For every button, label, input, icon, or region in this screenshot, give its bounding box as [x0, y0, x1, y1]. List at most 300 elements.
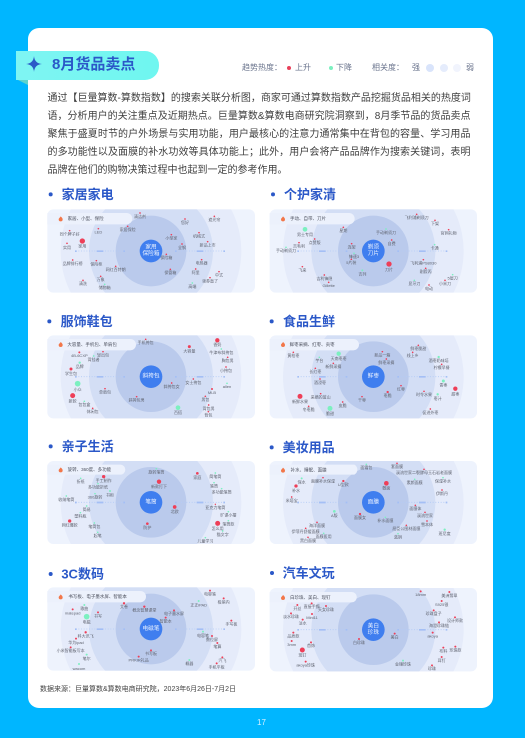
- keywords: wacom: [73, 666, 86, 671]
- keyword pill: 白珍珠、美白、现钉: [290, 594, 331, 601]
- keywords: 柠檬早餐: [434, 364, 450, 370]
- intro paragraph: 通过【巨量算数-算数指数】的搜索关联分析图，商家可通过算数指数产品挖掘货品相关的热度词: [48, 93, 471, 104]
- section heading: 食品生鲜: [283, 314, 335, 329]
- keywords: 屈臣公图材面膜: [392, 525, 420, 531]
- search relation chart: [47, 587, 255, 671]
- keywords: 海洋面膜: [309, 522, 325, 528]
- keywords: 5片装: [346, 259, 356, 265]
- keywords: LED: [94, 230, 102, 234]
- intro paragraph: 品牌在他们的购物决策过程中也起到一定的参考作用。: [48, 165, 288, 176]
- centre keyword: 刀片: [368, 249, 379, 257]
- keywords: [286, 462, 452, 543]
- centre keyword: 电磁笔: [143, 624, 160, 632]
- section bullet: [270, 445, 274, 449]
- keywords: 概器: [185, 660, 193, 666]
- keywords: 保水: [298, 478, 306, 484]
- keywords: 家庭: [193, 474, 201, 480]
- keywords: S925银: [435, 601, 448, 607]
- keywords: MLB: [208, 390, 216, 395]
- keywords: 18mm: [415, 592, 427, 597]
- keywords: 新款打下: [151, 483, 167, 489]
- keywords: 塑料瓶: [74, 512, 86, 518]
- keywords: 枣汁: [434, 395, 442, 401]
- keyword pill: [270, 339, 359, 350]
- keyword pill: 书写板、电子墨水屏、智能本: [68, 593, 127, 600]
- centre keyword: [362, 618, 385, 641]
- keywords: [60, 212, 223, 290]
- centre keyword: [140, 365, 162, 388]
- keywords: 米塔宝: [286, 497, 298, 503]
- section heading: 亲子生活: [62, 439, 114, 454]
- page number: 17: [257, 718, 266, 727]
- keywords: 领券直了: [202, 278, 218, 284]
- keywords: 阿里: [192, 269, 200, 275]
- keywords: [58, 468, 236, 544]
- section heading: 3C数码: [61, 567, 104, 582]
- keywords: 首饰: [307, 642, 315, 648]
- centre keyword: 剃须: [368, 243, 379, 251]
- keywords: 红枣: [397, 386, 405, 392]
- keywords: 飞利浦剃须刀: [405, 214, 429, 220]
- keywords: 休闲包: [87, 408, 99, 414]
- keywords: 面膜体: [409, 505, 421, 511]
- section bullet: [271, 192, 275, 196]
- keywords: 吉毛利: [293, 242, 305, 248]
- keywords: 吉利锋隐: [316, 275, 332, 281]
- keywords: allen: [223, 384, 231, 389]
- keywords: 全钢: [178, 244, 186, 250]
- intro paragraph: [48, 92, 471, 176]
- keywords: 您好: [181, 219, 189, 225]
- centre keyword: [140, 618, 162, 640]
- keywords: 笔筒包: [88, 523, 100, 529]
- section heading: 服饰鞋包: [61, 314, 113, 329]
- keywords: 珍珠: [428, 665, 436, 671]
- keywords: 多功能笔筒: [212, 488, 232, 494]
- keywords: 连架: [348, 244, 356, 250]
- heading ribbon: [16, 51, 159, 85]
- keywords: 收纳笔筒: [58, 496, 74, 502]
- keywords: 官网礼物: [441, 230, 457, 236]
- keywords: 背包男: [203, 405, 215, 411]
- keywords: 女士挎包: [185, 379, 201, 385]
- keyword pill: 旋转、360度、多功能: [68, 466, 112, 473]
- section heading: 个护家清: [284, 187, 336, 202]
- keywords: [276, 214, 458, 291]
- keywords: [57, 590, 237, 671]
- keywords: 小米智能板写本: [57, 647, 85, 653]
- keywords: 采摘的蓝山: [311, 394, 331, 400]
- keyword pill: [47, 339, 136, 350]
- keywords: 自费: [388, 240, 396, 246]
- keywords: 男包: [201, 396, 209, 402]
- keywords: 黄枯枣: [287, 352, 299, 358]
- ribbon fold: [16, 79, 28, 85]
- section bullet: [49, 192, 53, 196]
- keywords: 美白: [391, 634, 399, 640]
- keywords: 白珍珠: [353, 639, 365, 645]
- panel: 食品生鲜: [270, 314, 477, 418]
- keywords: 敷面: [382, 484, 390, 490]
- keywords: 简笔筒: [209, 473, 221, 479]
- keywords: 书写: [94, 612, 102, 618]
- keywords: 单肩包: [99, 388, 111, 394]
- centre keyword: 珍珠: [368, 628, 379, 636]
- keywords: 套面膜: [391, 463, 403, 469]
- panel: 个护家清: [270, 187, 477, 293]
- keywords: 3mm: [287, 642, 297, 647]
- keywords: 鲜枣采摘: [378, 359, 394, 365]
- keywords: 鲜枣脆甜: [410, 345, 426, 351]
- keywords: 汽飞: [218, 657, 226, 663]
- keywords: 起笔: [94, 532, 102, 538]
- keywords: 小型家: [165, 234, 177, 240]
- keywords: 家居保险: [120, 226, 136, 232]
- keywords: 皮脆: [339, 402, 347, 408]
- keywords: 牛津布斜挎包: [209, 349, 233, 355]
- keywords: 新品上市: [200, 242, 216, 248]
- keywords: 酒浸枣: [314, 379, 326, 385]
- keywords: 清洗: [79, 280, 87, 286]
- keywords: 面膜女: [354, 514, 366, 520]
- keywords: 脆甜: [326, 410, 334, 416]
- keywords: 溪流世家二裂酵母玉石岩老面膜: [396, 469, 452, 475]
- section bullet: [49, 444, 53, 448]
- keywords: 概念智慧课堂: [132, 606, 156, 612]
- keywords: akoya珍珠: [296, 662, 315, 668]
- keywords: 男士专用: [297, 231, 313, 237]
- keywords: 遮光帘: [208, 216, 220, 222]
- panel: 服饰鞋包: [47, 314, 255, 418]
- keywords: 手写板: [225, 620, 237, 626]
- legend: strong label: 强: [412, 63, 420, 72]
- keywords: 飞利浦PS8030: [410, 260, 437, 266]
- keywords: 小米刀: [439, 280, 451, 286]
- keywords: 北欧: [171, 508, 179, 514]
- keywords: 手机平板: [209, 664, 225, 670]
- keywords: 耳钉: [438, 657, 446, 663]
- keywords: 防护: [143, 524, 151, 530]
- keywords: 促进外枣: [422, 409, 438, 415]
- keywords: 新品一箱: [374, 352, 390, 358]
- keywords: 素颜面膜: [407, 479, 423, 485]
- keywords: 极萌内: [218, 598, 230, 604]
- keywords: 家用: [78, 242, 86, 248]
- keywords: 折纸: [77, 478, 85, 484]
- keywords: 保管箱: [164, 269, 176, 275]
- heading title: 8月货品卖点: [52, 56, 135, 73]
- legend: medium circle: [440, 64, 448, 72]
- keywords: 刀片: [385, 266, 393, 272]
- keywords: 甜枣: [451, 390, 459, 396]
- keywords: 多功能折纸: [88, 484, 108, 490]
- centre keyword: 鲜枣: [368, 372, 379, 380]
- keywords: 品质款: [287, 632, 299, 638]
- section bullet: [47, 319, 51, 323]
- panel: 美妆用品: [270, 440, 477, 544]
- keywords: 酒枣奶味培: [429, 357, 449, 363]
- centre keyword: [140, 240, 162, 262]
- keywords: 电子墨水屏: [164, 610, 184, 616]
- keywords: 歌曲: [80, 605, 88, 611]
- centre keyword: 保险箱: [143, 249, 160, 257]
- search relation chart: [270, 335, 477, 418]
- keywords: 笔尔: [83, 655, 91, 661]
- keywords: 补水: [292, 487, 300, 493]
- keywords: 旷课小摆: [220, 512, 236, 518]
- legend: falling label: 下降: [336, 63, 352, 72]
- intro paragraph: 聚焦于盛夏时节的户外场景与实用功能，用户最核心的注意力通常集中在背包的容量、学习用品: [48, 129, 470, 140]
- ribbon band: [16, 51, 159, 80]
- keywords: 轻出包: [97, 352, 109, 358]
- keywords: 笔算: [213, 643, 221, 649]
- keywords: 设计师款: [447, 617, 463, 623]
- keywords: 干枣: [358, 396, 366, 402]
- legend: trend label: 趋势热度：: [242, 63, 282, 72]
- keywords: 面霜包: [360, 464, 372, 470]
- search relation chart: [47, 335, 255, 418]
- keyword pill: [47, 465, 125, 475]
- keywords: 珍珠款: [449, 646, 461, 652]
- keywords: 淡水珍珠: [283, 613, 299, 619]
- panel: 家居家电: [47, 187, 255, 293]
- legend: falling dot: [329, 66, 333, 70]
- keyword pill: [270, 213, 355, 224]
- keywords: 时令水果: [416, 391, 432, 397]
- keywords: 淡水: [299, 620, 307, 626]
- search relation chart: [47, 209, 255, 293]
- intro paragraph: 的多功能性以及面膜的补水功效等具体功能上；此外，用户会将产品品牌作为搜索关键词，表明: [48, 147, 470, 158]
- keywords: 斜挎包女: [164, 383, 180, 389]
- keywords: 点赞版: [309, 239, 321, 245]
- keywords: 冬枣脆: [303, 406, 315, 412]
- keywords: 笔筒款: [222, 520, 234, 526]
- keywords: 飞来: [298, 268, 306, 272]
- keywords: 书写板: [145, 650, 157, 656]
- section heading: 汽车文玩: [283, 566, 335, 581]
- keywords: 手动剃须刀: [276, 247, 296, 253]
- keywords: 溪流世家: [417, 512, 433, 518]
- keywords: 数位屏: [206, 636, 218, 642]
- search relation chart: [270, 209, 477, 293]
- panel: 亲子生活: [47, 439, 255, 544]
- keywords: 亚克力笔筒: [205, 504, 225, 510]
- keywords: 面膜补水保湿: [311, 478, 335, 484]
- legend: relevance label: 相关度：: [372, 63, 404, 72]
- keywords: 机械式: [193, 232, 205, 238]
- keywords: 背挂者: [88, 356, 100, 362]
- centre keyword: 美白: [368, 621, 379, 629]
- keywords: 芋台: [315, 357, 323, 363]
- keywords: 电磁: [83, 618, 91, 624]
- keyword pill: 鲜枣采摘、红枣、贡枣: [290, 341, 335, 348]
- keywords: 华为ipad: [68, 639, 84, 645]
- keywords: 书柜: [106, 492, 114, 498]
- data source note: 数据来源：巨量算数&算数电商研究院，2023年6月26日-7月2日: [40, 686, 236, 693]
- keyword pill: 家居、小型、保险: [68, 215, 104, 222]
- keyword pill: [270, 592, 357, 602]
- search relation chart: [270, 588, 477, 672]
- keywords: A版: [331, 512, 338, 518]
- panel: 汽车文玩: [270, 566, 477, 672]
- keywords: 显牙刀: [408, 281, 420, 286]
- keywords: 手工制作: [96, 477, 112, 483]
- legend: [242, 63, 474, 72]
- keywords: 电容笔: [197, 632, 209, 638]
- keywords: 简易: [83, 506, 91, 512]
- keywords: Gillette: [322, 283, 336, 288]
- search relation chart: [47, 461, 255, 544]
- keywords: 同个牌子好: [60, 230, 80, 236]
- intro paragraph: 语，分析用户的关注重点及近期热点。巨量算数&算数电商研究院洞察到，8月季节品的货品卖点: [48, 111, 470, 122]
- keywords: 伊菲丹舒缓面膜: [292, 528, 320, 534]
- legend: weak circle: [453, 64, 461, 72]
- centre keyword: [362, 240, 385, 262]
- keywords: 正正iPAD: [190, 602, 207, 608]
- keywords: U型款: [338, 481, 349, 487]
- legend: rising label: 上升: [295, 63, 311, 72]
- keywords: [65, 338, 234, 418]
- keywords: 天女珍珠: [318, 606, 334, 612]
- keywords: Mini11: [306, 615, 319, 620]
- keywords: 实用: [63, 244, 71, 250]
- keywords: 手机挎包: [138, 339, 154, 345]
- keywords: 智能本: [160, 618, 172, 624]
- keywords: 保险箱: [160, 254, 172, 260]
- legend: strong circle: [426, 64, 434, 72]
- keyword pill: [47, 213, 132, 224]
- keywords: 儿童学习: [197, 538, 213, 544]
- keywords: 百搭: [174, 409, 182, 415]
- keywords: akoya: [427, 634, 439, 638]
- keywords: PRKIR礼品: [129, 656, 149, 662]
- keywords: 清洁剂: [134, 213, 146, 219]
- search relation chart: [270, 461, 477, 544]
- keywords: 雪本体: [421, 521, 433, 527]
- keywords: 青枣: [439, 382, 447, 388]
- section heading: 美妆用品: [283, 440, 335, 455]
- keywords: 包包盒: [78, 401, 90, 407]
- keyword pill: [270, 465, 357, 475]
- keywords: 电热器: [196, 260, 208, 266]
- keywords: 直接手镯: [304, 603, 320, 609]
- centre keyword: [362, 365, 385, 388]
- keywords: 开丝: [293, 605, 301, 611]
- section bullet: [270, 571, 274, 575]
- keywords: 班尼度: [439, 530, 451, 536]
- centre keyword: 笔筒: [145, 497, 157, 505]
- keywords: [287, 344, 459, 416]
- keywords: 伊斯丹: [436, 490, 448, 496]
- keyword pill: 手动、自带、刀片: [290, 215, 326, 222]
- keywords: 网红百特朗: [106, 266, 126, 272]
- keywords: 星期: [339, 227, 347, 233]
- keywords: 新鲜采摘: [325, 363, 341, 369]
- keywords: 万象: [97, 276, 105, 282]
- keywords: 小众: [74, 386, 82, 392]
- keywords: 布料: [439, 648, 447, 654]
- keywords: 新鲜水果: [292, 398, 308, 404]
- keywords: 面膜医用: [316, 533, 332, 539]
- keywords: 网红爆款: [62, 522, 78, 528]
- centre keyword: 家用: [145, 243, 157, 251]
- keywords: 新款: [69, 398, 77, 404]
- keywords: 保险柜: [90, 260, 102, 266]
- keywords: 大容量: [183, 348, 195, 354]
- centre keyword: 面膜: [368, 497, 379, 505]
- keywords: 360旋转: [88, 494, 102, 500]
- keywords: 艾卷: [120, 603, 128, 609]
- legend: rising dot: [287, 66, 291, 70]
- keywords: 笔筒: [210, 482, 218, 488]
- keywords: [283, 590, 463, 671]
- keyword pill: 补水、睡眠、面膜: [291, 466, 327, 474]
- keywords: matepad: [65, 610, 80, 616]
- keywords: 小挎包: [220, 367, 232, 373]
- keywords: 5层刀: [448, 274, 458, 280]
- keywords: 黑白面膜: [300, 537, 316, 543]
- keywords: 背包: [204, 412, 212, 418]
- keywords: 珍珠盘子: [426, 610, 442, 616]
- centre keyword: [362, 491, 385, 514]
- keywords: 香奶: [213, 341, 221, 347]
- keywords: 吉列: [358, 270, 366, 276]
- keywords: 枣脆: [384, 392, 392, 398]
- keywords: 美洲翡翠: [441, 592, 457, 598]
- keywords: 现钉: [298, 652, 306, 658]
- icon: sparkle: [26, 56, 42, 72]
- keywords: 刚毅丙: [420, 268, 432, 274]
- panel: 3C数码: [47, 567, 255, 671]
- keywords: 海澄珍珠链: [429, 622, 449, 628]
- keywords: 卡通: [431, 244, 439, 250]
- section bullet: [270, 319, 274, 323]
- keywords: 胸包男: [222, 357, 234, 363]
- keywords: 品牌: [76, 363, 84, 369]
- keyword pill: 大容量、手机包、单肩包: [67, 341, 117, 348]
- keywords: 电容笔: [204, 590, 216, 596]
- keywords: 线上乡: [407, 352, 419, 358]
- keywords: 手动剃须刀: [376, 229, 396, 235]
- keywords: 保湿补水: [435, 478, 451, 484]
- keywords: 储物箱: [99, 284, 111, 290]
- keywords: 怎么用: [212, 525, 224, 531]
- keywords: 蓝铜: [394, 534, 402, 540]
- keywords: 旋转笔筒: [148, 468, 164, 474]
- section heading: 家居家电: [62, 187, 114, 202]
- keywords: 高端: [188, 283, 196, 289]
- section bullet: [49, 572, 53, 576]
- keywords: 天南枣枣: [331, 355, 347, 361]
- keywords: 4B-6CXP: [71, 353, 88, 358]
- keywords: 长红枣: [309, 368, 321, 374]
- keywords: 斜挎包男: [129, 396, 145, 402]
- keywords: 科大讯飞: [78, 632, 94, 638]
- keywords: 品牌排行榜: [63, 260, 83, 266]
- keywords: 学生包: [65, 370, 77, 376]
- legend: weak label: 弱: [466, 63, 474, 72]
- keywords: 猫文字: [217, 531, 229, 537]
- centre keyword: 斜挎包: [143, 372, 160, 380]
- keywords: 锋速3: [349, 253, 360, 259]
- centre keyword: [140, 491, 162, 514]
- keywords: 下架: [431, 220, 439, 226]
- keywords: 补水面膜: [377, 517, 393, 523]
- keywords: 电动: [425, 285, 433, 291]
- keyword pill: [47, 591, 146, 602]
- keywords: 中式: [215, 272, 223, 278]
- keywords: 金镶珍珠: [395, 660, 411, 666]
